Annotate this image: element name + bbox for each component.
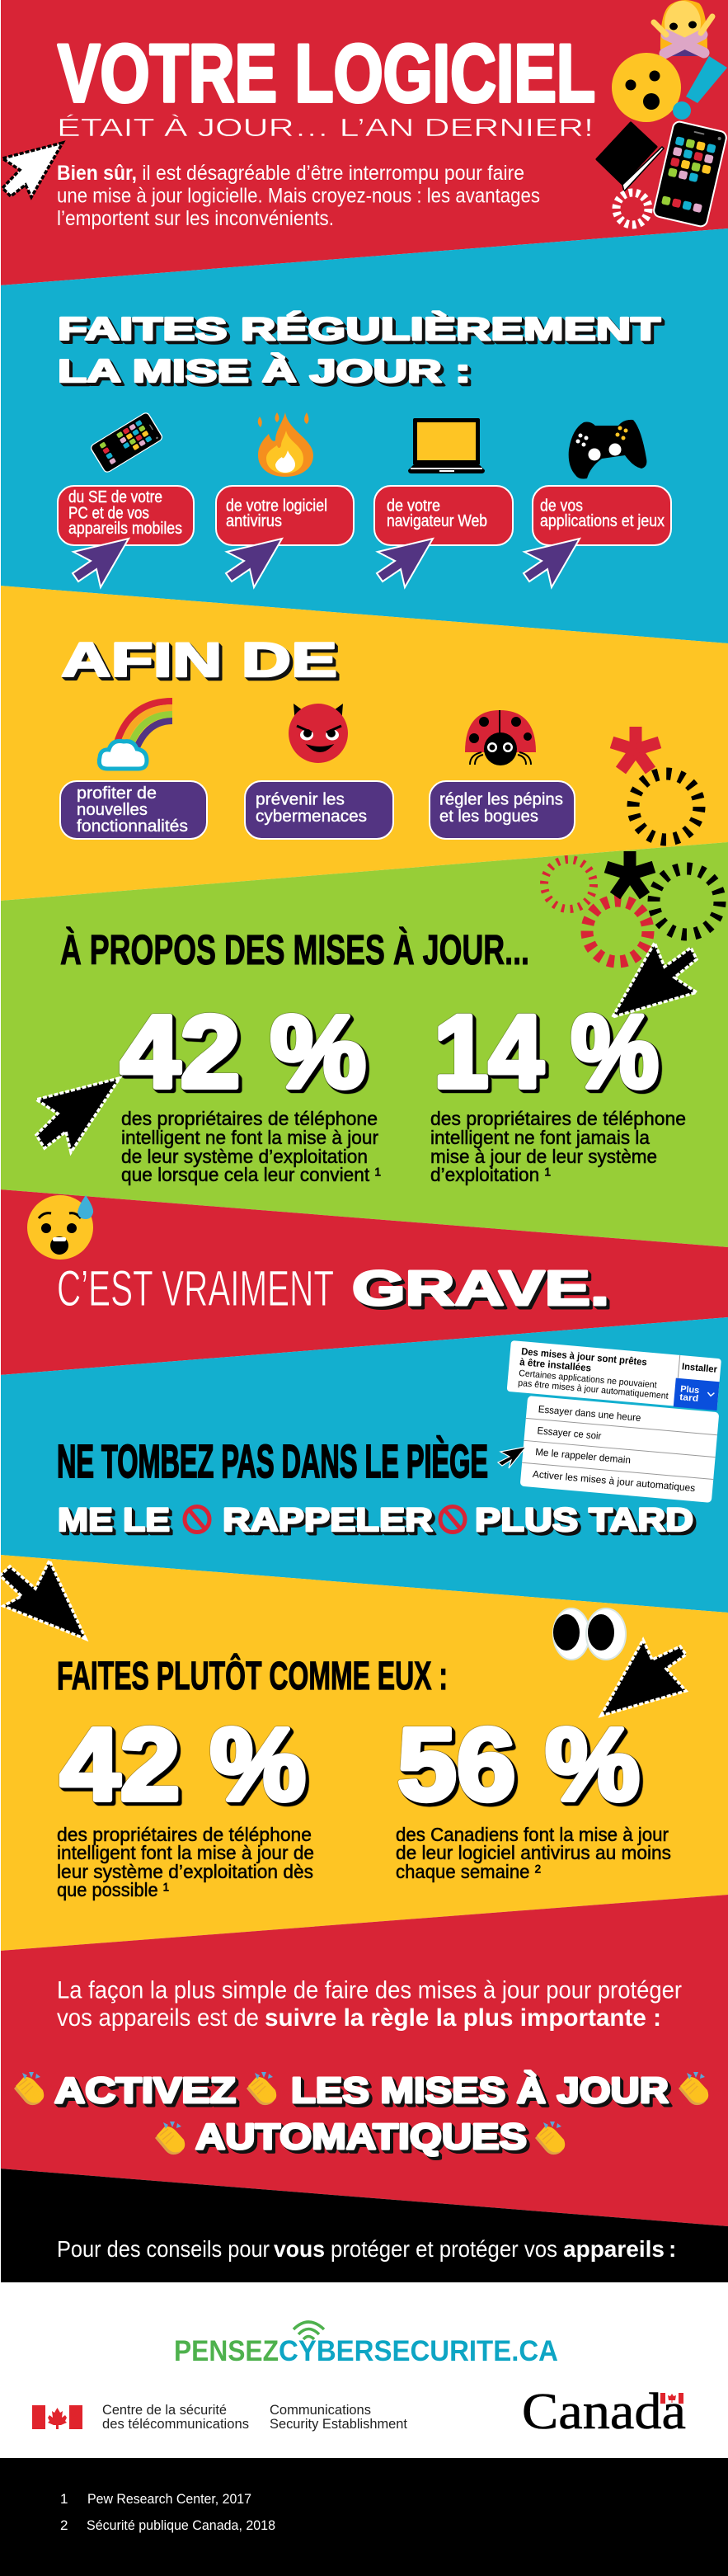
update dialog: Des mises à jour sont prêtes	[521, 1345, 648, 1368]
crossed-out remind me later: PLUS TARD	[475, 1502, 693, 1538]
stat: 42 percent: des propriétaires de téléphone	[57, 1824, 312, 1845]
stat: 14 percent: des propriétaires de téléphone	[430, 1108, 686, 1129]
stat: 14 percent	[430, 995, 686, 1185]
heading: C’EST VRAIMENT	[57, 1260, 334, 1316]
icon: white pixel cursor	[2, 143, 63, 197]
stat: 14 percent: d’exploitation ¹	[430, 1164, 551, 1185]
bubble: cyberthreats: cybermenaces	[256, 808, 367, 826]
heading: LA MISE À JOUR :	[58, 353, 471, 389]
stat: 42 percent: que possible ¹	[57, 1879, 169, 1900]
panel: advice prompt	[0, 2169, 728, 2282]
organisation name: Security Establishment	[270, 2416, 407, 2432]
icon: red thin ring	[544, 859, 594, 909]
stat: 42 percent: intelligent ne font la mise à jour	[121, 1127, 378, 1148]
intro text: La façon la plus simple de faire des mises à jour pour protéger	[57, 1976, 682, 2004]
icon: small cursor	[498, 1447, 526, 1468]
icon: black cursor left	[36, 1078, 120, 1152]
heading: GRAVE.	[352, 1261, 609, 1316]
panel: most important rule	[0, 1895, 728, 2226]
icon: laptop screen	[408, 418, 485, 473]
stat: 56 percent: chaque semaine ²	[396, 1861, 541, 1882]
icon: woman crossing arms	[654, 0, 712, 56]
crossed-out remind me later: ME LE	[58, 1502, 170, 1538]
icon: game controller	[569, 420, 646, 478]
intro text: une mise à jour logicielle. Mais croyez-nous : les avantages	[57, 185, 540, 208]
bubble: operating system: du SE de votre	[68, 488, 162, 506]
bubble: new features: profiter de	[77, 784, 157, 803]
logo: Canada wordmark: Canada	[522, 2384, 686, 2440]
icon: phone tilted	[90, 412, 163, 473]
bubble: new features: fonctionnalités	[77, 817, 188, 836]
advice text: vous	[274, 2236, 325, 2262]
organisation name: Communications	[270, 2402, 371, 2418]
icon: rainbow	[99, 701, 172, 769]
bubble: antivirus	[216, 486, 354, 545]
organisation name	[102, 2402, 407, 2432]
update dialog: Activer les mises à jour automatiques	[532, 1468, 696, 1494]
advice text: protéger et protéger vos	[331, 2236, 557, 2262]
logo: pensezcybersecurite	[174, 2322, 558, 2367]
update dialog: Essayer dans une heure	[538, 1403, 641, 1424]
update dialog: Essayer ce soir	[537, 1425, 602, 1442]
rule headline: ACTIVEZ	[54, 2070, 236, 2111]
rule headline	[14, 2070, 708, 2157]
bubble: bugs: régler les pépins	[439, 790, 563, 808]
advice text	[57, 2236, 676, 2262]
crossed-out remind me later	[58, 1502, 693, 1538]
icon: black cursor right	[601, 1640, 686, 1716]
icon: black loading ring	[633, 774, 699, 840]
icon: exclamation mark	[673, 56, 727, 120]
intro text	[57, 162, 540, 230]
icon: red thick ring	[587, 901, 648, 962]
advice text: :	[669, 2236, 676, 2262]
bubble: apps and games: de vos	[540, 497, 583, 515]
rule headline: AUTOMATIQUES	[195, 2117, 527, 2157]
bubble: operating system: appareils mobiles	[68, 520, 182, 538]
advice text: appareils	[563, 2236, 665, 2262]
stat: 42 percent: 42 %	[60, 1707, 306, 1822]
stat: 56 percent: de leur logiciel antivirus au moins	[396, 1842, 671, 1863]
update dialog	[499, 1340, 724, 1503]
heading: FAITES RÉGULIÈREMENT	[58, 311, 660, 347]
bubble: new features: nouvelles	[77, 801, 148, 819]
intro text: Bien sûr, il est désagréable d’être interrompu pour faire	[57, 162, 524, 185]
panel: logos	[0, 2282, 728, 2458]
bubble: operating system	[58, 486, 194, 545]
logo: pensezcybersecurite: CYBERSECURITE.CA	[279, 2335, 558, 2367]
icon: devil	[289, 704, 348, 763]
footnote 2: Sécurité publique Canada, 2018	[87, 2517, 275, 2533]
intro text: vos appareils est de	[57, 2004, 259, 2032]
stat: 56 percent: des Canadiens font la mise à jour	[396, 1824, 669, 1845]
bubble: cyberthreats: prévenir les	[256, 790, 345, 808]
icon: flame	[258, 412, 313, 477]
stat: 42 percent: 42 %	[120, 995, 366, 1109]
stat: 42 percent	[57, 1707, 314, 1900]
bubble: operating system: PC et de vos	[68, 505, 149, 523]
panel: footnotes	[0, 2458, 728, 2576]
footnote 1: Pew Research Center, 2017	[87, 2491, 251, 2507]
bubble: apps and games	[533, 486, 671, 545]
subtitle: ÉTAIT À JOUR… L’AN DERNIER!	[57, 113, 594, 142]
stat: 14 percent: mise à jour de leur système	[430, 1146, 657, 1167]
stat: 42 percent: intelligent font la mise à jour de	[57, 1842, 314, 1863]
intro text: l’emportent sur les inconvénients.	[57, 207, 334, 230]
icon: ladybug	[465, 710, 536, 765]
update dialog: Me le rappeler demain	[535, 1446, 632, 1466]
bubble: antivirus: de votre logiciel	[226, 497, 327, 515]
organisation name: Centre de la sécurité	[102, 2402, 227, 2418]
stat: 42 percent: leur système d’exploitation dès	[57, 1861, 313, 1882]
bubble: bugs: et les bogues	[439, 808, 538, 826]
update dialog: tard	[679, 1392, 699, 1404]
advice text: Pour des conseils pour	[57, 2236, 270, 2262]
panel: do as they do	[0, 1555, 728, 1951]
crossed-out remind me later: RAPPELER	[223, 1502, 433, 1538]
rule headline: LES MISES À JOUR	[291, 2070, 669, 2111]
bubble: antivirus: antivirus	[226, 512, 282, 530]
panel: header	[0, 0, 728, 285]
panel: do not fall into the trap	[0, 1317, 728, 1613]
bubble: new features	[60, 781, 207, 839]
stat: 42 percent	[120, 995, 381, 1185]
stat: 42 percent: que lorsque cela leur convient ¹	[121, 1164, 381, 1185]
bubble: web browser: de votre	[387, 497, 440, 515]
update dialog: à être installées	[519, 1356, 592, 1374]
organisation name: des télécommunications	[102, 2416, 249, 2432]
logo: flag	[32, 2405, 82, 2429]
heading: À PROPOS DES MISES À JOUR...	[60, 926, 529, 973]
update dialog: Certaines applications ne pouvaient	[519, 1368, 657, 1391]
heading: FAITES PLUTÔT COMME EUX :	[57, 1653, 448, 1698]
heading	[58, 311, 660, 389]
stat: 14 percent: intelligent ne font jamais la	[430, 1127, 650, 1148]
stat: 56 percent	[396, 1707, 671, 1882]
update dialog: pas être mises à jour automatiquement	[518, 1378, 669, 1401]
bubble: web browser: navigateur Web	[387, 512, 487, 530]
update dialog: Plus	[680, 1384, 700, 1396]
panel: update regularly	[0, 228, 728, 643]
stat: 42 percent: des propriétaires de téléphone	[121, 1108, 378, 1129]
bubble: bugs	[430, 781, 575, 839]
icon: white loading ring	[617, 193, 648, 224]
title: VOTRE LOGICIEL	[58, 27, 595, 119]
intro text: suivre la règle la plus importante :	[265, 2004, 661, 2032]
bubble: apps and games: applications et jeux	[540, 512, 665, 530]
icon: phone	[653, 120, 727, 228]
icon: purple cursors	[73, 539, 580, 587]
icon: surprised face	[612, 53, 681, 122]
panel: about updates	[0, 842, 728, 1247]
stat: 42 percent: de leur système d’exploitation	[121, 1146, 368, 1167]
heading: AFIN DE	[61, 633, 337, 687]
icon: black cursor top left	[0, 1561, 86, 1639]
icon: eyes	[553, 1608, 626, 1660]
icon: worried face	[27, 1195, 93, 1260]
icon: laptop	[597, 123, 664, 191]
bubble: web browser	[374, 486, 513, 545]
intro text	[57, 1976, 682, 2032]
panel: really serious	[0, 1189, 728, 1375]
icon: red asterisk	[612, 727, 660, 770]
footnote 2: 2	[60, 2517, 68, 2533]
bubble: cyberthreats	[245, 781, 393, 839]
icon: black ring	[654, 869, 720, 935]
update dialog: Installer	[681, 1362, 718, 1375]
footnote 1: 1	[60, 2491, 68, 2507]
panel: in order to	[0, 586, 728, 901]
icon: black asterisk	[606, 851, 654, 896]
icon: black cursor	[613, 943, 697, 1017]
stat: 56 percent: 56 %	[397, 1707, 640, 1822]
stat: 14 percent: 14 %	[434, 995, 659, 1109]
logo: pensezcybersecurite: PENSEZ	[174, 2335, 279, 2367]
